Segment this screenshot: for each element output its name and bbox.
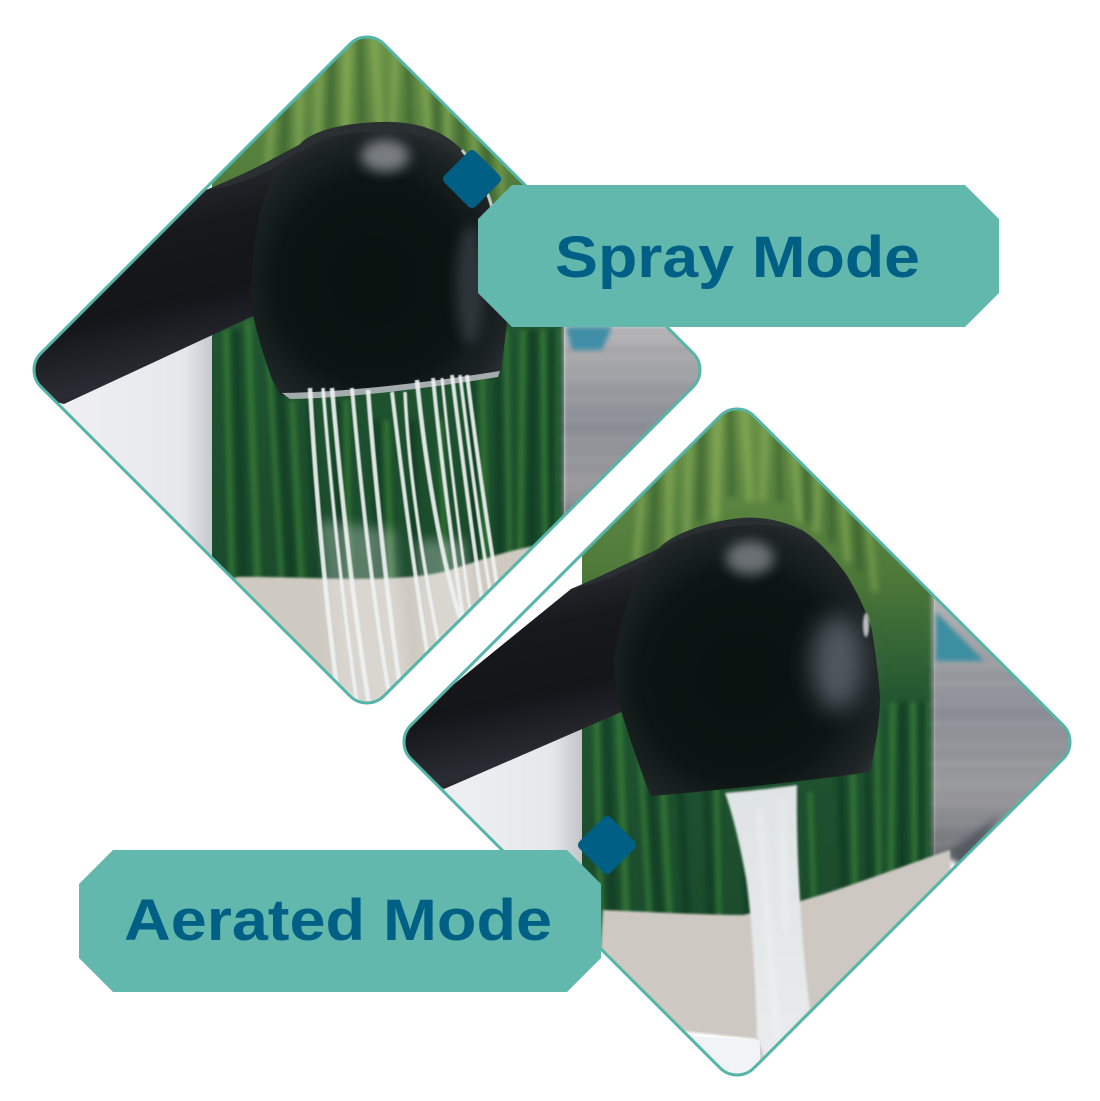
white wall background <box>60 335 212 556</box>
faucet neck <box>25 145 320 404</box>
head side sheen <box>456 225 484 345</box>
silver rim <box>462 150 492 208</box>
dark basket base <box>950 816 998 867</box>
knit basket background <box>559 327 698 518</box>
panel border <box>24 27 710 713</box>
heading: spray mode: Spray Mode <box>555 225 920 290</box>
grass background <box>582 402 934 962</box>
grass background <box>212 30 564 590</box>
faucet head <box>251 132 507 398</box>
head highlight <box>361 140 409 172</box>
panel border <box>394 399 1080 1085</box>
spray outlet rim <box>282 371 500 399</box>
callout: spray mode <box>478 185 999 327</box>
knit basket background <box>928 593 1068 864</box>
callout: aerated mode <box>79 850 601 992</box>
edge glare <box>863 613 869 637</box>
head highlight <box>726 541 774 575</box>
panel: spray mode photo <box>20 27 730 720</box>
faucet head <box>614 525 880 796</box>
aerated water stream <box>725 785 810 1060</box>
white wall background <box>443 729 582 865</box>
panel: aerated mode photo <box>394 399 1100 1085</box>
head side sheen <box>812 615 864 711</box>
planter background <box>600 850 952 1060</box>
faucet top slit band <box>571 518 802 589</box>
base white below planter <box>690 1036 760 1074</box>
faucet top slit band <box>206 122 462 190</box>
water texture <box>760 800 786 1040</box>
water mist <box>318 520 475 710</box>
water streams <box>310 375 497 710</box>
blue accent background <box>936 612 984 661</box>
icon: aerated marker diamond <box>576 814 638 876</box>
heading: aerated mode: Aerated Mode <box>124 888 552 953</box>
planter background <box>234 544 533 702</box>
icon: spray marker diamond <box>441 148 503 210</box>
blue accent background <box>566 327 612 350</box>
faucet neck <box>406 549 658 789</box>
